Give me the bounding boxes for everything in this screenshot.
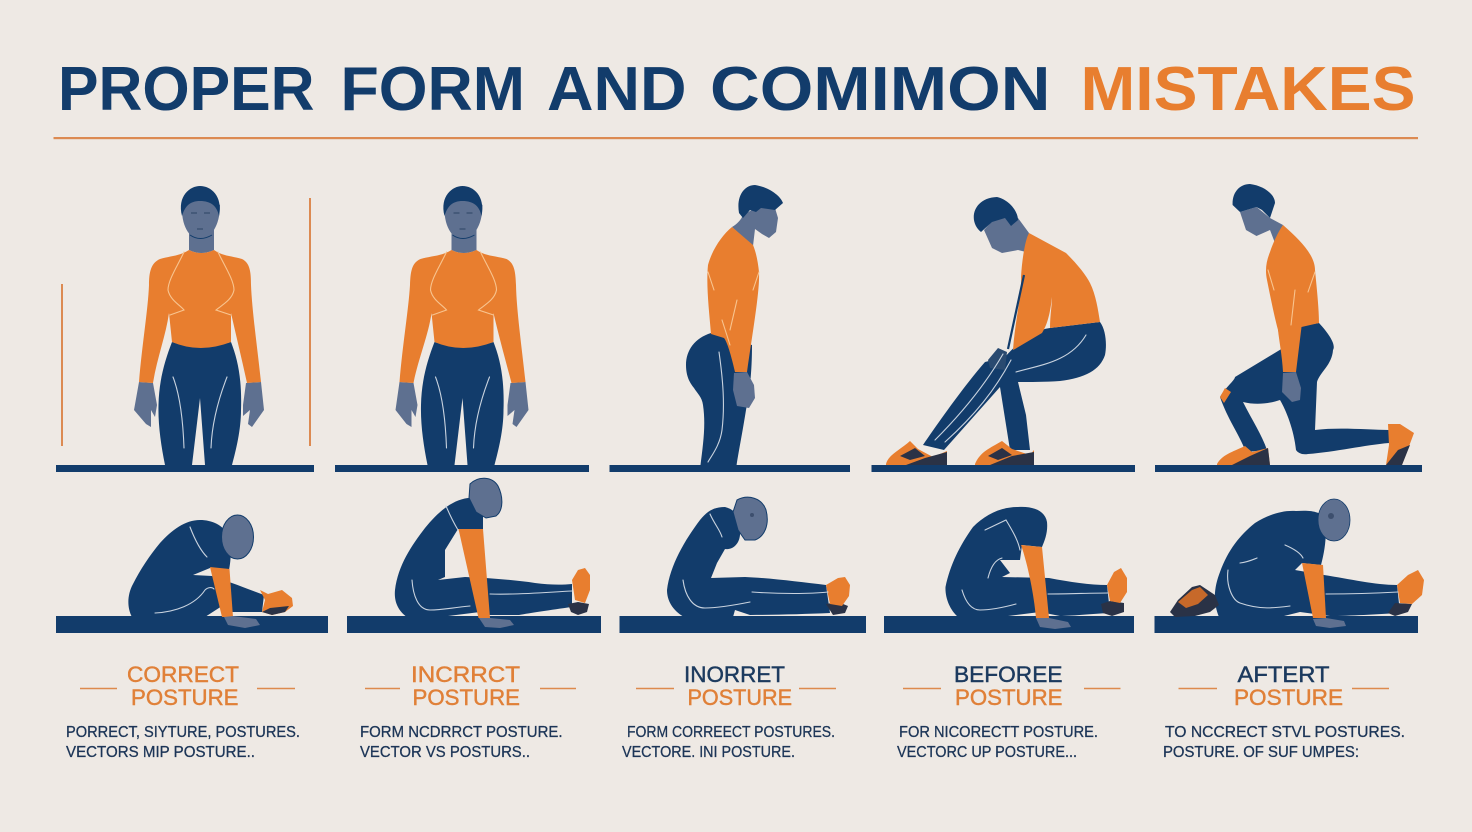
panel: bottom row seated postures — [56, 478, 1424, 633]
label: incorrect posture: POSTURE — [412, 685, 520, 710]
title: MISTAKES — [1080, 55, 1416, 124]
figure: seated fold 2 — [395, 478, 590, 628]
figure: front standing 1 — [134, 186, 264, 465]
guide line right — [309, 198, 311, 446]
label: inorrect posture: FORM CORREECT POSTURES. — [627, 724, 835, 741]
label: after posture: POSTURE. OF SUF UMPES: — [1163, 744, 1359, 761]
label: correct posture — [66, 662, 300, 761]
label: inorrect posture: INORRET — [684, 662, 785, 687]
figure: front standing 2 — [396, 186, 528, 465]
label: inorrect posture: VECTORE. INI POSTURE. — [622, 744, 795, 761]
label: correct posture: POSTURE — [131, 685, 238, 710]
figure: side standing — [686, 185, 783, 465]
label: incorrect posture: FORM NCDRRCT POSTURE. — [360, 724, 562, 741]
title — [58, 55, 1416, 124]
label: incorrect posture: INCRRCT — [411, 662, 520, 687]
guide line left — [61, 284, 63, 446]
label: correct posture: CORRECT — [127, 662, 239, 687]
label: after posture — [1163, 662, 1405, 761]
title: FORM — [340, 55, 525, 124]
label: after posture: TO NCCRECT STVL POSTURES. — [1165, 724, 1405, 741]
panel: labels — [66, 662, 1405, 761]
label: after posture: AFTERT — [1238, 662, 1330, 687]
title: COMIMON — [710, 55, 1050, 124]
figure: lunge — [1217, 184, 1414, 465]
label: after posture: POSTURE — [1234, 685, 1343, 710]
label: correct posture: VECTORS MIP POSTURE.. — [66, 744, 255, 761]
figure: seated stretch with leg extended — [886, 197, 1106, 465]
figure: seated fold 4 — [945, 507, 1127, 629]
panel: top row standing postures — [56, 184, 1422, 472]
floor bars top row — [56, 465, 1422, 472]
figure: seated fold 1 — [128, 515, 293, 628]
label: incorrect posture: VECTOR VS POSTURS.. — [360, 744, 530, 761]
label: inorrect posture: POSTURE — [688, 685, 792, 710]
label: correct posture: PORRECT, SIYTURE, POSTURES. — [66, 724, 300, 741]
label: inorrect posture — [622, 662, 836, 761]
label: before posture: FOR NICORECTT POSTURE. — [899, 724, 1098, 741]
figure: seated fold 5 — [1170, 499, 1424, 628]
title: PROPER — [58, 55, 314, 124]
label: before posture — [897, 662, 1120, 761]
label: before posture: VECTORC UP POSTURE... — [897, 744, 1077, 761]
label: before posture: POSTURE — [955, 685, 1062, 710]
title: AND — [547, 55, 686, 124]
floor bars bottom row — [56, 616, 1418, 633]
figure: seated fold 3 — [667, 497, 850, 617]
label: before posture: BEFOREE — [954, 662, 1062, 687]
label: incorrect posture — [360, 662, 576, 761]
